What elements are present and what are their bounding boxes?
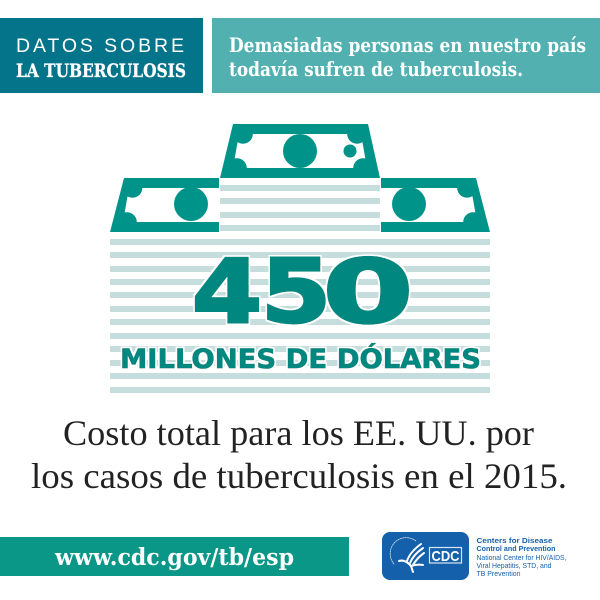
right bill	[381, 178, 490, 232]
description text: Costo total para los EE. UU. por	[63, 413, 534, 453]
millones de dolares label: MILLONES DE DÓLARES	[120, 343, 481, 375]
agency text: Viral Hepatitis, STD, and	[476, 561, 552, 570]
agency text: Control and Prevention	[476, 544, 556, 553]
agency text: Centers for Disease	[476, 536, 552, 545]
icon: hhs eagle	[390, 538, 424, 572]
big number 450: 5	[261, 241, 331, 343]
left bill	[110, 178, 219, 232]
big number 450	[192, 241, 413, 343]
description text	[31, 413, 567, 496]
lower stack stripes	[110, 239, 490, 393]
money stack illustration	[110, 124, 490, 393]
agency text	[476, 536, 566, 578]
header banner: message	[212, 18, 600, 93]
url bar	[0, 537, 349, 576]
agency text: National Center for HIV/AIDS,	[476, 553, 566, 562]
header badge: datos sobre la tuberculosis	[0, 18, 203, 93]
header banner: message: todavía sufren de tuberculosis.	[229, 57, 523, 81]
big number 450: 0	[323, 241, 413, 343]
header badge: datos sobre la tuberculosis: DATOS SOBRE	[16, 35, 184, 57]
cdc wordmark: CDC	[432, 548, 460, 565]
description text: los casos de tuberculosis en el 2015.	[31, 456, 567, 496]
big number 450: 4	[192, 241, 262, 343]
url bar: www.cdc.gov/tb/esp	[54, 544, 294, 571]
top bill	[220, 124, 380, 178]
cdc logo	[382, 532, 469, 580]
agency text: TB Prevention	[476, 569, 520, 578]
header badge: datos sobre la tuberculosis: LA TUBERCULOSIS	[16, 60, 186, 82]
upper stack stripes	[220, 185, 380, 231]
